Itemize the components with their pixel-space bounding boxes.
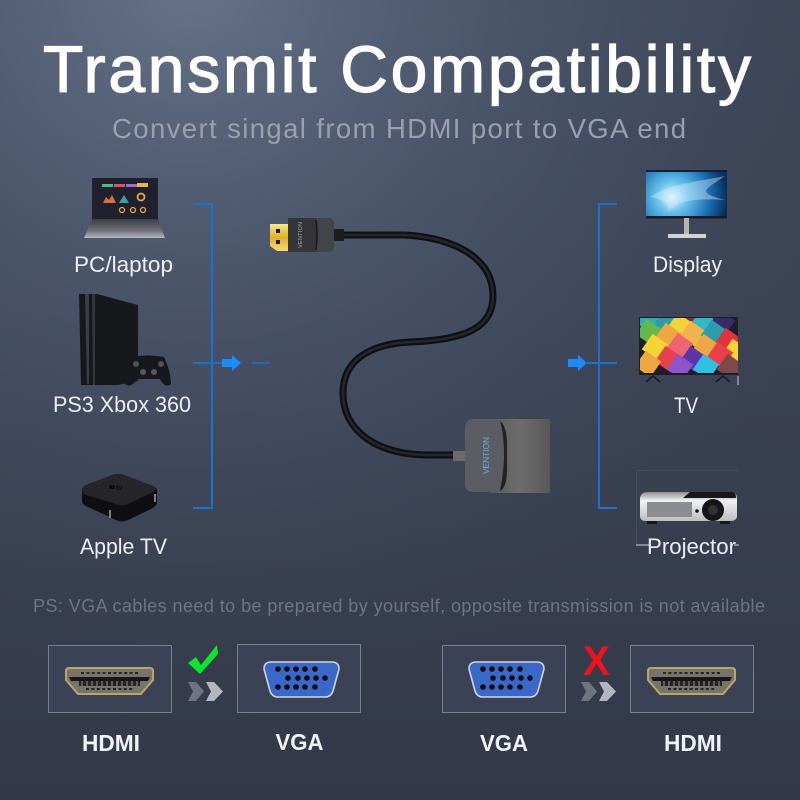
subtitle: Convert singal from HDMI port to VGA end [112, 113, 686, 144]
box: HDMI target [630, 646, 754, 712]
icon: display monitor [646, 170, 727, 238]
icon: Apple TV box: tv [116, 485, 122, 492]
cable with HDMI plug and VGA adapter [270, 218, 550, 493]
arrow: right blue [568, 355, 587, 371]
label: VGA: VGA [276, 729, 324, 755]
label: Display: Display [653, 252, 722, 277]
label: PC/laptop: PC/laptop [74, 252, 173, 277]
note: PS: PS: VGA cables need to be prepared by yourself, opposite transmission is not available [33, 596, 765, 616]
right bracket connector [585, 204, 617, 508]
box: VGA source [442, 646, 566, 712]
label: PS3 Xbox 360: PS3 Xbox 360 [53, 392, 191, 417]
label: HDMI: HDMI [82, 730, 140, 756]
left bracket connector [193, 204, 270, 508]
label: VGA: VGA [480, 730, 528, 756]
HDMI plug body: VENTION [298, 222, 304, 248]
icon: television [639, 317, 738, 385]
label: Apple TV: Apple TV [80, 534, 167, 559]
HDMI plug body [288, 218, 344, 252]
VGA adapter [453, 419, 550, 493]
icon: laptop [84, 178, 165, 238]
VGA adapter: VENTION [482, 437, 491, 474]
title: Transmit Compatibility [43, 32, 751, 106]
box: VGA target [238, 644, 360, 712]
HDMI gold tip [270, 224, 288, 251]
label: TV: TV [674, 393, 698, 418]
panel: VGA to HDMI not supported [442, 637, 754, 756]
label: Projector: Projector [647, 534, 736, 559]
icon: green check [188, 645, 218, 674]
arrow: left blue [222, 355, 241, 371]
cable [343, 235, 493, 455]
arrow: grey chevrons [188, 682, 223, 701]
icon: game console and controller [79, 294, 171, 386]
label: HDMI: HDMI [664, 730, 722, 756]
arrow: grey chevrons [581, 682, 616, 701]
box: HDMI source [48, 646, 172, 712]
icon: red cross: X [583, 637, 610, 684]
icon: projector [636, 470, 739, 545]
panel: HDMI to VGA supported [48, 644, 360, 756]
icon: Apple TV box [82, 474, 157, 522]
